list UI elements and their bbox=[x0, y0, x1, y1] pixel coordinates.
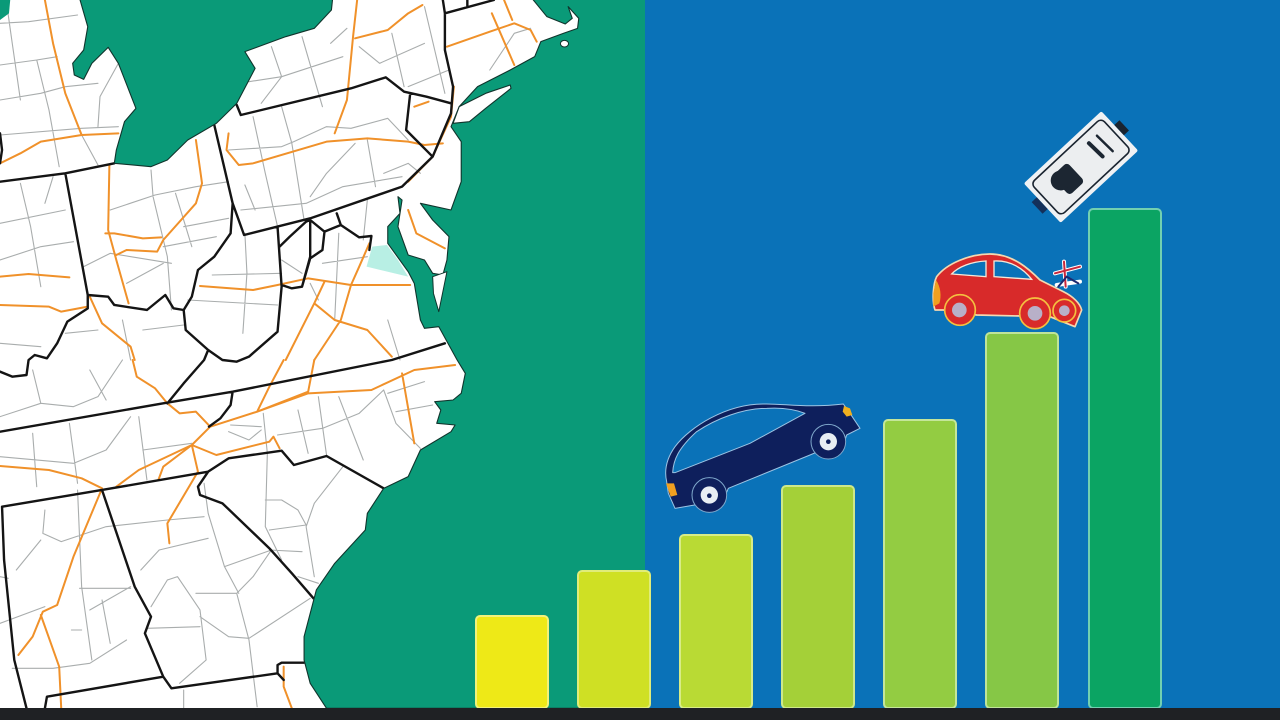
bar 5 bbox=[884, 420, 956, 708]
dark glyph blob bbox=[1047, 162, 1085, 200]
rear wheel bbox=[692, 478, 727, 512]
small lake bbox=[0, 0, 10, 20]
panel: blue background bbox=[645, 0, 1280, 720]
hubs bbox=[952, 303, 1070, 321]
front wheel bbox=[811, 424, 846, 459]
bar 2 bbox=[578, 571, 650, 708]
terminal left bbox=[1032, 197, 1048, 214]
road network: highways south bbox=[0, 360, 455, 708]
head light bbox=[843, 406, 852, 417]
small island bbox=[560, 40, 569, 47]
rear light bbox=[933, 280, 941, 307]
road network: minor roads bbox=[0, 0, 531, 360]
state borders bbox=[0, 0, 494, 432]
rear window bbox=[952, 261, 986, 277]
battery inner outline bbox=[1031, 118, 1131, 216]
car body bbox=[666, 404, 860, 508]
panel: road map bbox=[0, 0, 653, 710]
bar 1 bbox=[476, 616, 548, 708]
bar 7 bbox=[1089, 209, 1161, 708]
front window bbox=[994, 261, 1032, 279]
icon: navy car bbox=[666, 404, 860, 512]
state borders south bbox=[2, 451, 384, 708]
car body bbox=[933, 254, 1082, 327]
ocean bbox=[304, 0, 653, 708]
terminal right bbox=[1114, 120, 1129, 135]
crash burst bbox=[1055, 262, 1080, 287]
great lake bbox=[73, 0, 333, 167]
icon: crashed red car bbox=[933, 254, 1082, 329]
car window bbox=[673, 408, 805, 473]
road network: minor roads south bbox=[0, 360, 433, 708]
bar 4 bbox=[782, 486, 854, 708]
cape sliver bbox=[433, 272, 447, 312]
icon: battery bbox=[1019, 106, 1143, 228]
bar chart bbox=[476, 209, 1161, 708]
bottom bar bbox=[0, 708, 1280, 720]
road network: highways bbox=[0, 0, 537, 360]
bar 6 bbox=[986, 333, 1058, 708]
bar 3 bbox=[680, 535, 752, 708]
wheels bbox=[945, 295, 1076, 329]
dark glyph strokes bbox=[1089, 135, 1113, 159]
light teal shallows bbox=[367, 245, 408, 277]
tail light bbox=[666, 483, 677, 497]
land bbox=[0, 0, 647, 710]
coastal island bbox=[453, 85, 511, 123]
battery casing bbox=[1024, 111, 1138, 223]
